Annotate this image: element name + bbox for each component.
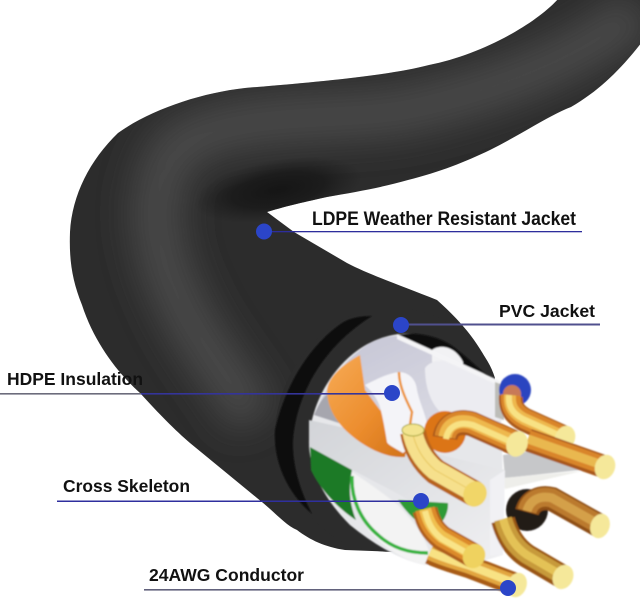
- cross skeleton spines: [309, 334, 582, 565]
- cable core and conductors: [309, 334, 619, 599]
- wire: lower right conductor: [503, 519, 577, 593]
- callout: 24AWG Conductor: [144, 565, 516, 596]
- callout: LDPE Weather Resistant Jacket: [256, 209, 582, 240]
- wire: front conductor: [402, 424, 491, 511]
- wire: blue conductor: [499, 374, 579, 453]
- cable core opening: [309, 334, 582, 565]
- callout: Cross Skeleton: Cross Skeleton: [63, 476, 190, 496]
- end cap: PVC ring: [275, 307, 495, 552]
- wire: black conductor: [506, 489, 613, 541]
- callout: HDPE Insulation: [0, 369, 400, 401]
- green wire pair: [310, 447, 448, 565]
- orange wire pair: [327, 355, 428, 457]
- wire: rear conductor: [528, 439, 619, 482]
- callout: PVC Jacket: [393, 301, 600, 333]
- callout: LDPE Weather Resistant Jacket: LDPE Weather Resistant Jacket: [312, 209, 577, 230]
- callout: HDPE Insulation: HDPE Insulation: [7, 369, 143, 389]
- wire: lower front conductor: [425, 509, 489, 572]
- callout: PVC Jacket: PVC Jacket: [499, 301, 595, 321]
- callout: 24AWG Conductor: 24AWG Conductor: [149, 565, 304, 585]
- wire: orange conductor: [424, 411, 531, 460]
- callout: Cross Skeleton: [57, 476, 429, 509]
- black shadow behind spine: [397, 334, 490, 378]
- wire: lower rear conductor: [430, 552, 530, 599]
